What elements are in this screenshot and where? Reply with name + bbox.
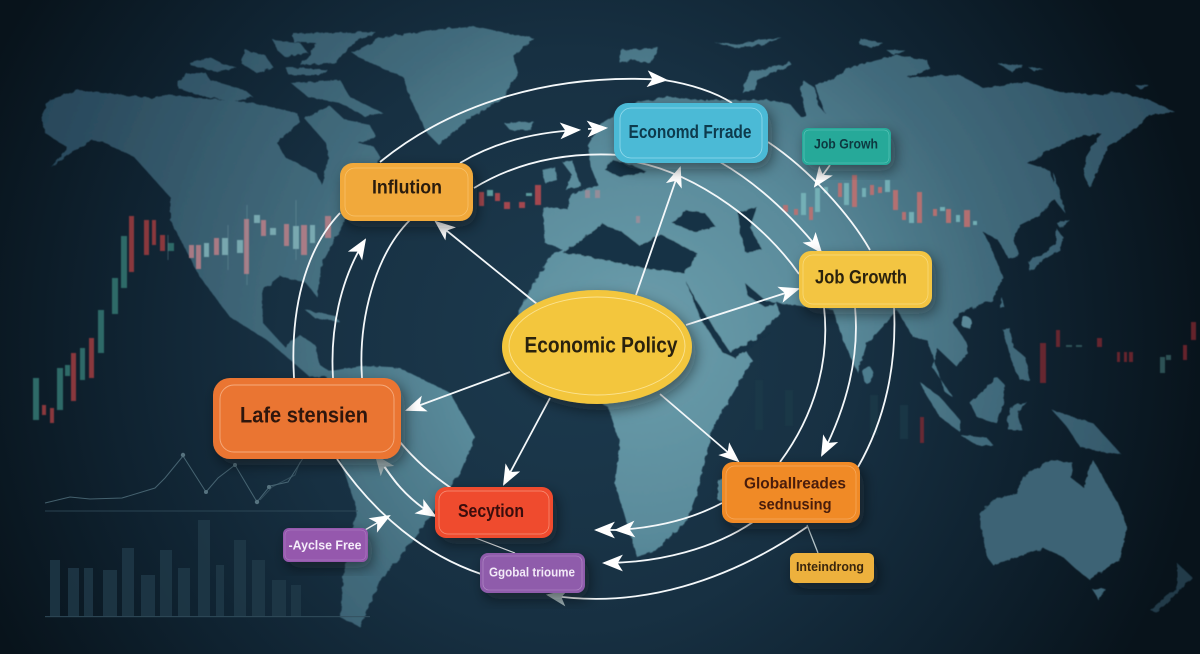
bar chart: lower left [45, 520, 370, 617]
arrow: left middle arc [332, 240, 365, 378]
arrow: trade stub [588, 128, 606, 129]
node: Job Growth [799, 251, 932, 308]
center node: Economic Policy [502, 290, 692, 404]
arrow: trade right to job growth [768, 142, 870, 250]
node: Ayclse Free: -Ayclse Free [288, 538, 362, 552]
node: Globallreades sednusing [722, 462, 860, 523]
arrow: Global to Secytion, double [616, 503, 722, 530]
node: Inteindrong: Inteindrong [796, 560, 864, 574]
arrow: long arc to job growth [636, 162, 799, 274]
node: Ggobal trioume [480, 553, 585, 593]
node: Economd Frrade [614, 103, 768, 163]
arrow: Secytion to Lafe, two heads [382, 462, 435, 516]
node: Lafe stensien: Lafe stensien [240, 402, 368, 428]
node: Globallreades sednusing: sednusing [758, 496, 832, 514]
node: Inflution: Inflution [372, 178, 442, 198]
arrow: small job growth pointer [815, 165, 830, 186]
arrow: long lower arc [548, 527, 807, 599]
node: Ayclse Free [283, 528, 368, 562]
node: Secytion: Secytion [458, 501, 524, 521]
node: Inteindrong [790, 553, 874, 583]
node: Inflution [340, 163, 473, 221]
arrow: Lafe to Secytion [400, 442, 451, 488]
arrow: outer arc to top [380, 79, 666, 162]
arrow: job growth down 1 [780, 307, 825, 462]
arrow: outer arc, continued [664, 80, 732, 103]
line chart: lower left [45, 435, 358, 511]
arrow: Global left lower [604, 522, 753, 563]
connection arcs and arrows [293, 79, 894, 599]
arrow: Lafe to Ggobal [337, 459, 481, 574]
node: Job Growth small: Job Growh [814, 136, 878, 152]
arrow: job growth down 2 [822, 307, 856, 455]
arrow: Secytion to Ggobal [473, 537, 515, 553]
arrow: center to job growth [686, 289, 798, 325]
arrow: grey head to Lafe [376, 456, 398, 485]
arrow: link to Intendrong [807, 525, 818, 553]
candlestick chart: mid Atlantic [479, 185, 640, 223]
arrow: center to Global [660, 394, 738, 461]
node: Job Growth: Job Growth [815, 268, 907, 288]
arrow: double head stub [596, 529, 616, 531]
arrow: center to Secytion [504, 398, 550, 484]
arrow: job growth down 3 [858, 307, 894, 467]
center node: Economic Policy: Economic Policy [524, 332, 678, 358]
node: Job Growth small [802, 128, 891, 165]
arrow: left inner arc [361, 220, 410, 378]
arrow: Inflution to trade, lower [474, 154, 620, 188]
node: Globallreades sednusing: Globallreades [744, 476, 846, 492]
arrow: left outer arc [293, 213, 340, 378]
node: Ggobal trioume: Ggobal trioume [489, 564, 575, 580]
candlestick chart: upper right [783, 175, 977, 227]
node: Secytion [435, 487, 553, 538]
candlestick chart: far right, faded [755, 322, 1196, 443]
arrow: center to trade [636, 168, 680, 295]
arrow: trade to job growth [720, 162, 821, 252]
node: Lafe stensien [213, 378, 401, 459]
candlestick chart: left [33, 200, 331, 423]
node: Economd Frrade: Economd Frrade [628, 122, 752, 142]
arrow: center to Lafe [407, 372, 510, 410]
arrow: Inflution to trade, first head [460, 130, 579, 163]
arrow: Ayclse link [365, 516, 389, 530]
arrow: center to Inflution [436, 222, 537, 304]
